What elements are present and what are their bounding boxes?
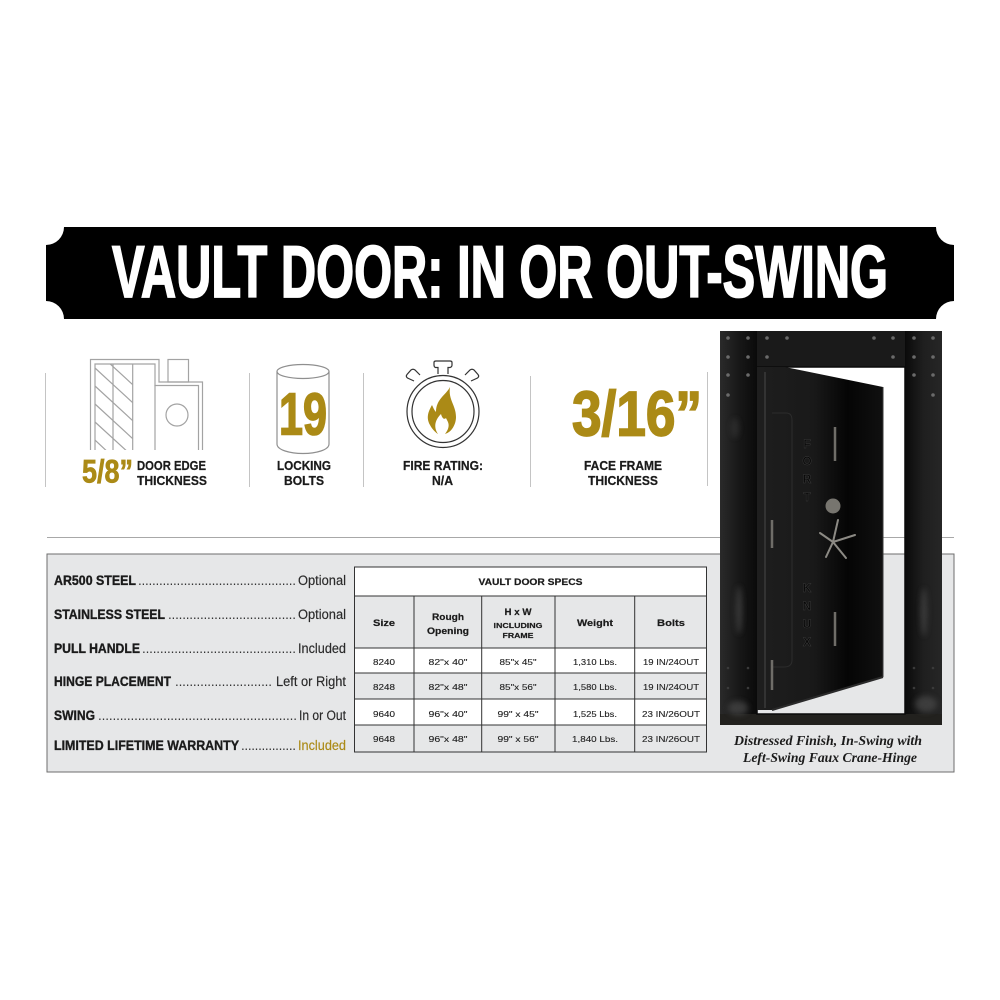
row: swing	[54, 708, 346, 723]
row: AR500 steel: Optional	[298, 573, 346, 588]
row: limited lifetime warranty: ................	[241, 738, 296, 753]
label locking bolts: LOCKING	[277, 458, 331, 473]
label locking bolts: BOLTS	[284, 473, 324, 488]
table header: H x W	[504, 607, 532, 617]
table rows: 1,310 Lbs.	[573, 657, 617, 667]
table rows	[373, 657, 700, 744]
row: stainless steel: ....................................	[168, 607, 296, 622]
label fire rating: N/A	[432, 473, 454, 488]
table rows: 9640	[373, 709, 395, 719]
door lettering FORT KNOX: O	[802, 454, 812, 468]
table rows: 96"x 40"	[428, 709, 468, 719]
panel: specifications	[47, 554, 954, 772]
row: AR500 steel	[54, 573, 346, 588]
row: pull handle	[54, 641, 346, 656]
table header	[373, 607, 685, 640]
row: pull handle: ...........................................	[142, 641, 296, 656]
door lettering FORT KNOX: R	[803, 472, 812, 486]
table rows: 82"x 40"	[428, 657, 468, 667]
icon: stopwatch with flame	[406, 361, 479, 448]
title banner	[46, 227, 954, 319]
row: AR500 steel: .............................................	[138, 573, 296, 588]
door frame	[720, 331, 942, 725]
table rows: 1,580 Lbs.	[573, 682, 617, 692]
frame rivets	[726, 336, 935, 689]
table rows: 96"x 48"	[428, 734, 468, 744]
row: hinge placement	[54, 674, 346, 689]
stat: door edge thickness	[82, 350, 207, 490]
icon: door edge cross-section	[90, 358, 204, 450]
row: pull handle: PULL HANDLE	[54, 641, 140, 656]
feature list	[54, 573, 346, 753]
row: swing: SWING	[54, 708, 95, 723]
door lettering FORT KNOX: N	[803, 599, 811, 613]
open door leaf	[757, 367, 883, 710]
table: vault door specs	[354, 567, 706, 752]
door lettering FORT KNOX: T	[803, 490, 811, 504]
table rows: 1,840 Lbs.	[572, 734, 618, 744]
table rows: 19 IN/24OUT	[643, 657, 699, 667]
label fire rating: FIRE RATING:	[403, 458, 483, 473]
door lettering FORT KNOX: F	[803, 437, 811, 451]
row: limited lifetime warranty	[54, 738, 346, 753]
table header: Rough	[432, 612, 464, 622]
stat: fire rating	[403, 361, 483, 488]
table rows: 85"x 56"	[500, 682, 536, 692]
horizontal divider	[47, 536, 954, 538]
door handle wheel	[820, 498, 855, 558]
caption: Distressed Finish, In-Swing with	[733, 733, 922, 748]
label door edge thickness: THICKNESS	[137, 473, 207, 488]
stat: face frame thickness	[572, 380, 702, 488]
label face frame thickness: THICKNESS	[588, 473, 658, 488]
value 3/16 inch: 3/16”	[572, 380, 702, 450]
table rows: 99" x 45"	[498, 709, 538, 719]
row: pull handle: Included	[298, 641, 346, 656]
row: hinge placement: Left or Right	[276, 674, 346, 689]
row: hinge placement: ...........................	[175, 674, 272, 689]
row: limited lifetime warranty: LIMITED LIFETIME WARRANTY	[54, 738, 239, 753]
table rows: 19 IN/24OUT	[643, 682, 699, 692]
label face frame thickness: FACE FRAME	[584, 458, 662, 473]
door lettering FORT KNOX: K	[803, 581, 812, 595]
table rows: 23 IN/26OUT	[642, 709, 700, 719]
door lettering FORT KNOX	[802, 437, 812, 649]
row: swing: .......................................................	[98, 708, 297, 723]
vault door illustration	[720, 331, 942, 725]
table header: FRAME	[502, 631, 534, 640]
table header: Weight	[577, 618, 613, 628]
row: stainless steel: Optional	[298, 607, 346, 622]
value 5/8 inch: 5/8”	[82, 454, 133, 490]
caption: Left-Swing Faux Crane-Hinge	[742, 750, 917, 765]
table header: Size	[373, 618, 395, 628]
row: stainless steel	[54, 607, 346, 622]
table header: Opening	[427, 626, 469, 636]
table rows: 8240	[373, 657, 395, 667]
row: swing: In or Out	[299, 708, 346, 723]
label door edge thickness: DOOR EDGE	[137, 458, 206, 473]
infographic canvas	[45, 227, 954, 772]
table header: INCLUDING	[494, 621, 543, 630]
row: limited lifetime warranty: Included	[298, 738, 346, 753]
row: hinge placement: HINGE PLACEMENT	[54, 674, 172, 689]
stat: locking bolts	[277, 364, 331, 488]
icon: bolt cylinder	[277, 364, 329, 454]
door hinges and bars	[772, 427, 835, 690]
table rows: 8248	[373, 682, 395, 692]
value 19: 19	[279, 382, 327, 448]
door lettering FORT KNOX: U	[803, 617, 811, 631]
table rows: 85"x 45"	[500, 657, 536, 667]
table rows: 23 IN/26OUT	[642, 734, 700, 744]
table rows: 99" x 56"	[498, 734, 538, 744]
table rows: 1,525 Lbs.	[573, 709, 617, 719]
row: AR500 steel: AR500 STEEL	[54, 573, 136, 588]
table header: Bolts	[657, 618, 685, 628]
stat column dividers	[46, 372, 708, 487]
door lettering FORT KNOX: X	[803, 635, 811, 649]
table rows: 9648	[373, 734, 395, 744]
row: stainless steel: STAINLESS STEEL	[54, 607, 165, 622]
table title: VAULT DOOR SPECS	[478, 577, 582, 587]
table rows: 82"x 48"	[428, 682, 468, 692]
